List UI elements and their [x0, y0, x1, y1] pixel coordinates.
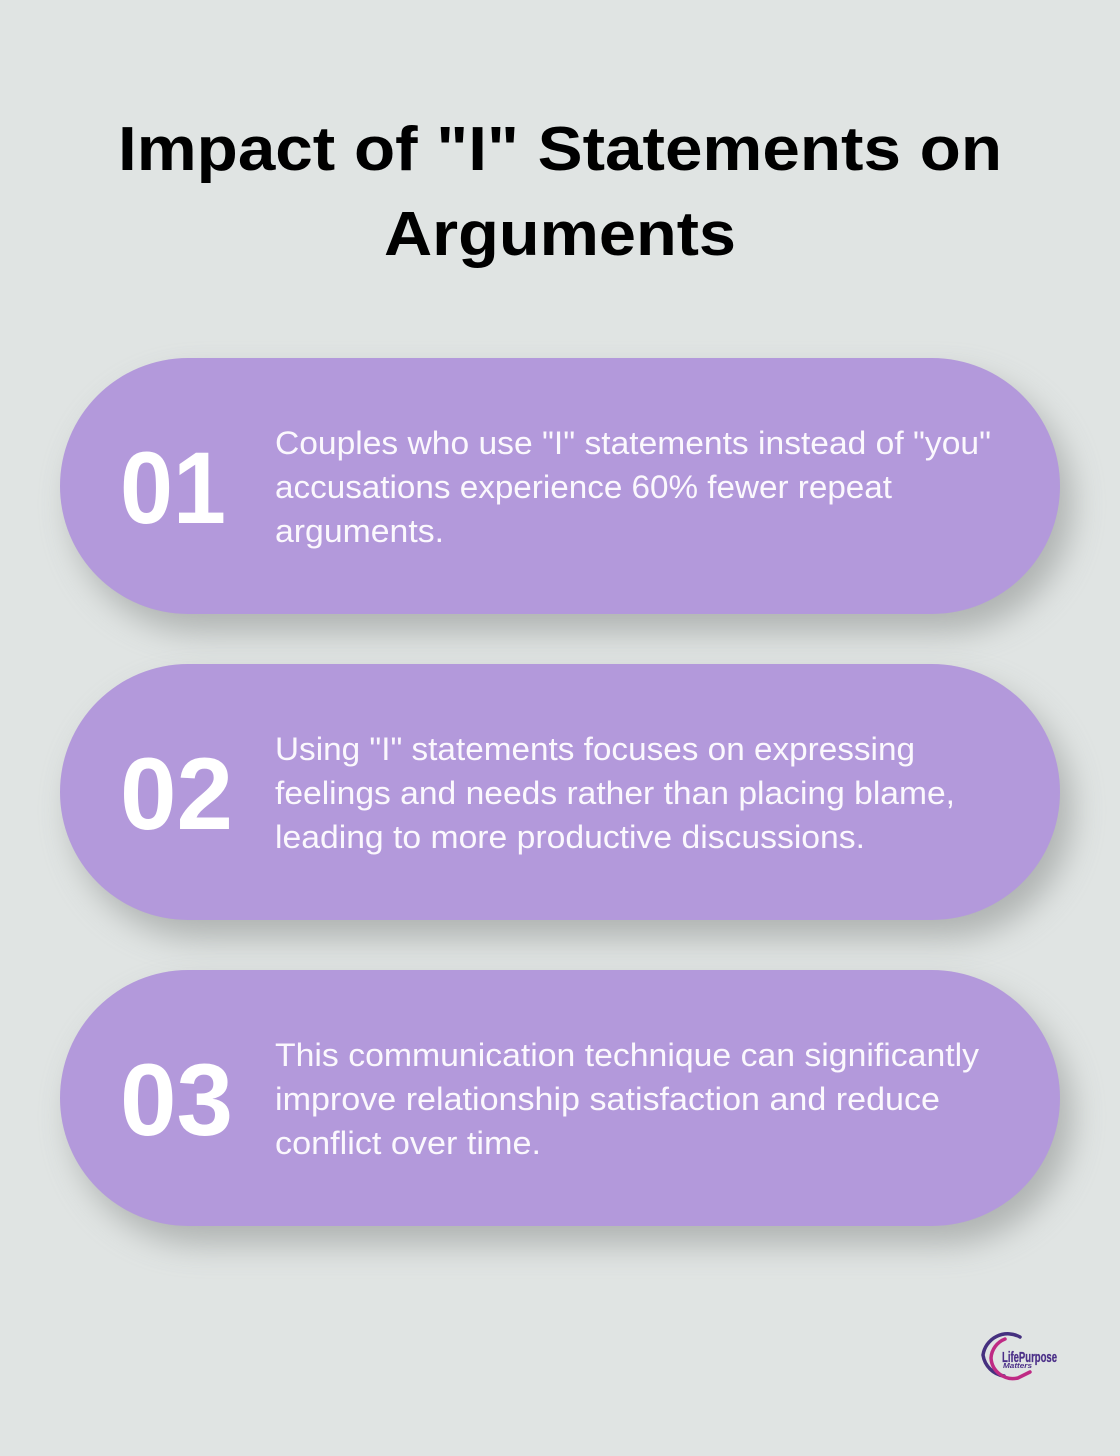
number 02: 02 — [120, 737, 233, 851]
text: statement 02: leading to more productive discussions. — [275, 819, 865, 855]
number 03: 03 — [120, 1043, 233, 1157]
icon: logo arcs — [983, 1334, 1030, 1379]
text: statement 02: Using "I" statements focuses on expressing — [275, 731, 915, 767]
text: statement 01: Couples who use "I" statements instead of "you" — [275, 425, 991, 461]
panel: statement 01 — [60, 358, 1072, 632]
panel: statement 03 — [60, 970, 1072, 1244]
title: Arguments — [384, 200, 736, 269]
number 01: 01 — [120, 431, 226, 545]
logo: Life Purpose Matters — [983, 1334, 1057, 1379]
text: statement 03: improve relationship satisfaction and reduce — [275, 1081, 940, 1117]
title — [118, 115, 1002, 269]
logo tagline: Matters — [1003, 1363, 1032, 1370]
text: statement 01 — [275, 425, 991, 549]
text: statement 01: arguments. — [275, 513, 444, 549]
text: statement 02 — [275, 731, 955, 855]
text: statement 01: accusations experience 60% fewer repeat — [275, 469, 892, 505]
text: statement 03 — [275, 1037, 979, 1161]
panel: statement 02 — [60, 664, 1072, 938]
logo wordmark: LifePurpose — [1002, 1349, 1057, 1366]
text: statement 03: This communication technique can significantly — [275, 1037, 979, 1073]
text: statement 03: conflict over time. — [275, 1125, 541, 1161]
text: statement 02: feelings and needs rather than placing blame, — [275, 775, 955, 811]
title: Impact of "I" Statements on — [118, 115, 1002, 184]
